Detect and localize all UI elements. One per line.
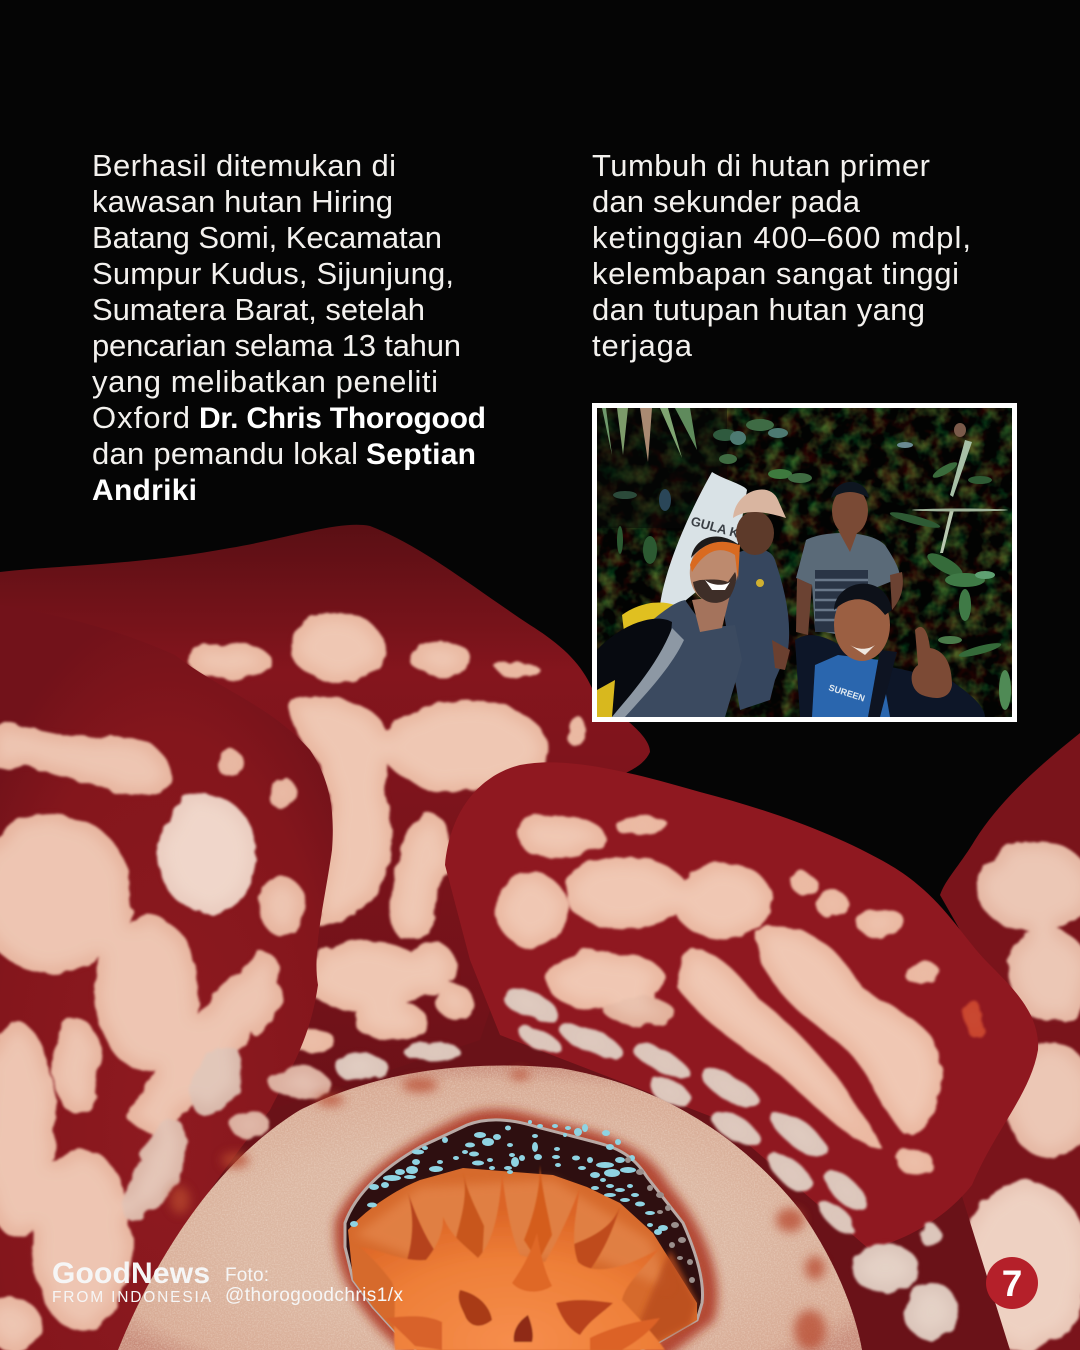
text block: left column: Sumpur Kudus, Sijunjung, xyxy=(92,256,454,291)
petal: left xyxy=(0,605,333,1350)
spines xyxy=(360,1165,665,1350)
text block: right column: terjaga xyxy=(592,328,693,363)
logo: GoodNews: GoodNews xyxy=(52,1257,210,1290)
man with thumbs up: SUREEN xyxy=(827,682,866,703)
central hole with spines xyxy=(345,1120,703,1350)
blue speckles xyxy=(350,1120,668,1235)
text block: left column xyxy=(92,148,486,507)
logo: GoodNews: FROM INDONESIA xyxy=(52,1289,212,1306)
photo credit: Foto: xyxy=(225,1265,269,1286)
man with thumbs up xyxy=(795,584,985,717)
text block: left column: Batang Somi, Kecamatan xyxy=(92,220,442,255)
bag xyxy=(660,472,747,605)
text block: left column: kawasan hutan Hiring xyxy=(92,184,393,219)
man in striped shirt xyxy=(796,482,903,640)
text block: left column: yang melibatkan peneliti xyxy=(92,364,438,399)
text block: left column: Berhasil ditemukan di xyxy=(92,148,396,183)
text block: left column: Sumatera Barat, setelah xyxy=(92,292,425,327)
petal: far right xyxy=(940,733,1080,1350)
photo: researchers in the forest: GULA K xyxy=(689,513,741,541)
text block: right column xyxy=(592,148,971,363)
text block: right column: Tumbuh di hutan primer xyxy=(592,148,930,183)
photo credit: @thorogoodchris1/x xyxy=(225,1285,404,1306)
text block: left column: Andriki xyxy=(92,474,197,507)
text block: right column: dan sekunder pada xyxy=(592,184,861,219)
man with headband xyxy=(597,535,742,717)
text block: right column: dan tutupan hutan yang xyxy=(592,292,925,327)
logo: GoodNews xyxy=(52,1257,212,1306)
petal: right centre xyxy=(445,762,1038,1250)
text block: left column: Septian xyxy=(366,438,476,471)
text block: left column: pencarian selama 13 tahun xyxy=(92,328,461,363)
forest foliage xyxy=(597,408,1012,717)
photo credit xyxy=(225,1265,404,1306)
petal: back centre xyxy=(0,525,650,1110)
ridges around the disc xyxy=(230,982,958,1338)
text block: right column: kelembapan sangat tinggi xyxy=(592,256,959,291)
photo: researchers in the forest xyxy=(594,406,1014,720)
text block: left column: Dr. Chris Thorogood xyxy=(199,402,486,435)
base under petals xyxy=(90,1000,1010,1350)
page number badge xyxy=(986,1257,1038,1309)
text block: left column: dan pemandu lokal xyxy=(92,436,358,471)
text block: left column: Oxford xyxy=(92,400,190,435)
text block: right column: ketinggian 400–600 mdpl, xyxy=(592,220,971,255)
page number badge: 7 xyxy=(1002,1263,1022,1304)
flower illustration xyxy=(0,525,1080,1350)
man in cap xyxy=(725,490,790,710)
central disc rim xyxy=(118,1065,862,1350)
